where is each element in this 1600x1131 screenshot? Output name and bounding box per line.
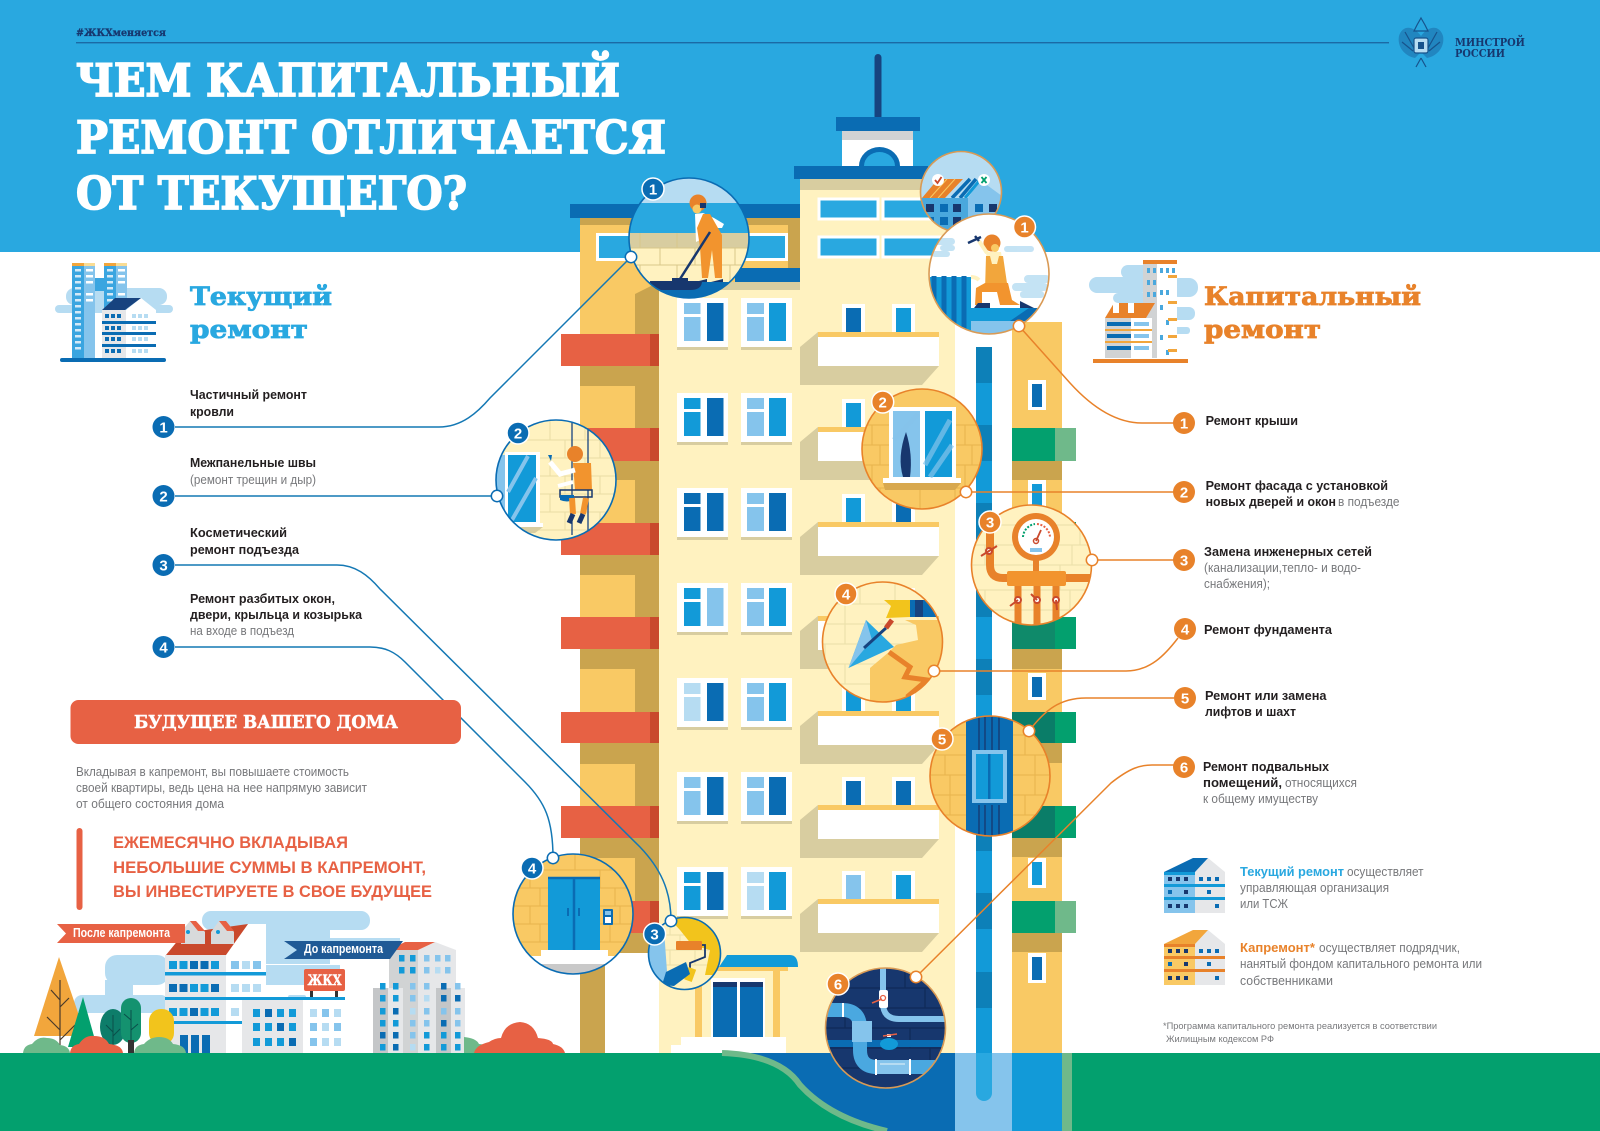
right list: item 6 — [1173, 756, 1357, 806]
icon: eagle emblem — [1399, 18, 1443, 67]
left heading icon: buildings — [55, 263, 173, 362]
magnifier badges: orange: 5 — [938, 732, 946, 748]
connection markers — [491, 251, 1098, 983]
ground — [0, 1053, 1600, 1131]
right heading icon: buildings — [1089, 260, 1198, 363]
right list: item 2: новых дверей и окон — [1206, 495, 1336, 509]
illustration: town before and after — [23, 911, 565, 1053]
left wing — [561, 204, 800, 1053]
magnifier badges: orange: 1 — [1020, 220, 1029, 236]
footnote — [1163, 1021, 1437, 1045]
right list: item 5 — [1174, 687, 1328, 719]
callout: monthly investing: НЕБОЛЬШИЕ СУММЫ В КАПРЕМОНТ, — [113, 859, 426, 877]
title — [76, 51, 666, 220]
trees — [34, 957, 174, 1053]
callout: monthly investing: ЕЖЕМЕСЯЧНО ВКЛАДЫВАЯ — [113, 834, 348, 852]
right list: item 3: 3 — [1180, 552, 1188, 570]
left list: item 2: 2 — [159, 488, 168, 506]
text block: investment note: своей квартиры, ведь цена на нее напрямую зависит — [76, 781, 367, 795]
right list: item 3: (канализации,тепло- и водо- — [1204, 561, 1361, 575]
left list: item 1: 1 — [159, 420, 168, 436]
right list: item 5: 5 — [1181, 690, 1189, 708]
left list: item 2: Межпанельные швы — [190, 456, 316, 470]
magnifier R3: utilities gauge — [971, 505, 1092, 625]
legend: current repair: осуществляет — [1347, 865, 1424, 879]
magnifier badges: orange: 2 — [879, 394, 887, 412]
header rule — [76, 42, 1389, 43]
magnifier badges: blue: 1 — [649, 182, 657, 198]
ribbon: before repair: До капремонта — [304, 942, 384, 956]
heading: capital repair: Капитальный — [1204, 282, 1421, 311]
left list: item 4: Ремонт разбитых окон, — [190, 592, 335, 606]
legend: current repair: управляющая организация — [1240, 881, 1389, 895]
magnifier R6: basement pipes — [825, 968, 946, 1089]
text block: investment note: Вкладывая в капремонт, вы повышаете стоимость — [76, 765, 349, 779]
banner: future of your home: БУДУЩЕЕ ВАШЕГО ДОМА — [134, 713, 399, 733]
icon: orange house — [1164, 930, 1225, 985]
window rows — [677, 298, 792, 919]
ribbon: before repair — [284, 941, 403, 959]
callout: monthly investing — [76, 828, 432, 910]
title: ЧЕМ КАПИТАЛЬНЫЙ — [76, 51, 620, 107]
connector lines: right — [916, 326, 1178, 977]
icon: blue house — [1164, 858, 1225, 913]
header band — [0, 0, 1600, 252]
right list: item 6: к общему имуществу — [1203, 792, 1319, 806]
magnifier badges: blue: 4 — [528, 860, 537, 878]
left list: item 4: на входе в подъезд — [190, 624, 295, 638]
ribbon: after repair — [57, 924, 185, 943]
connector lines: left — [175, 257, 671, 921]
magnifier: roof condition — [920, 152, 1002, 233]
right list: item 1 — [1173, 412, 1298, 434]
magnifier L1: roof worker — [628, 178, 750, 299]
right list: item 1: 1 — [1180, 416, 1188, 432]
right list: item 6: Ремонт подвальных — [1203, 760, 1329, 774]
magnifier R1: roofer — [929, 214, 1050, 334]
right list: item 4 — [1174, 618, 1333, 640]
sign ЖКХ: ЖКХ — [308, 973, 342, 989]
heading: current repair: Текущий — [190, 282, 332, 311]
sign ЖКХ — [304, 969, 345, 997]
elevator shaft — [955, 285, 1012, 1053]
building before repair — [373, 942, 465, 1053]
magnifier L2: facade worker — [496, 420, 616, 540]
heading: capital repair — [1204, 282, 1421, 344]
hashtag: #ЖКХменяется — [76, 28, 167, 39]
underground — [722, 1053, 1072, 1131]
magnifier badges: orange: 3 — [986, 514, 994, 532]
legend: capital repair: собственниками — [1240, 974, 1333, 988]
right list: item 3: снабжения); — [1204, 577, 1270, 591]
left list: item 1 — [152, 388, 307, 438]
magnifier L3: paint roller — [648, 917, 722, 990]
entrance — [671, 955, 798, 1053]
logo: Minstroy: МИНСТРОЙ — [1455, 34, 1525, 49]
right list: item 4: 4 — [1181, 622, 1190, 638]
legend: current repair: Текущий ремонт — [1240, 865, 1344, 879]
logo: Minstroy — [1399, 18, 1525, 67]
magnifier badges: orange: 4 — [842, 586, 851, 604]
legend: current repair — [1164, 858, 1424, 913]
left list: item 1: Частичный ремонт — [190, 388, 307, 402]
right list: item 6: 6 — [1180, 760, 1188, 776]
banner: future of your home — [70, 700, 461, 744]
right list: item 3: Замена инженерных сетей — [1204, 545, 1372, 559]
left list: item 4 — [152, 592, 363, 658]
right list: item 5: лифтов и шахт — [1205, 705, 1296, 719]
heading: current repair — [190, 282, 332, 344]
bushes — [23, 1022, 565, 1053]
legend: capital repair — [1164, 930, 1482, 988]
right list: item 2: 2 — [1180, 484, 1188, 502]
magnifier L4: entrance door — [513, 854, 633, 974]
ribbon: after repair: После капремонта — [73, 926, 171, 940]
magnifier R4: foundation repair — [822, 582, 944, 702]
legend: capital repair: нанятый фондом капитального ремонта или — [1240, 957, 1482, 971]
right wing — [1012, 322, 1076, 1053]
text block: investment note — [76, 765, 367, 811]
right list: item 6: относящихся — [1285, 776, 1357, 790]
main building — [561, 54, 1076, 1131]
left list: item 3: ремонт подъезда — [190, 543, 300, 557]
magnifier R5: elevator — [930, 716, 1050, 837]
title: ОТ ТЕКУЩЕГО? — [76, 167, 467, 220]
balconies — [800, 304, 939, 952]
logo: Minstroy: РОССИИ — [1455, 47, 1505, 60]
magnifier badges: blue: 3 — [650, 926, 659, 944]
left list: item 3: Косметический — [190, 526, 287, 540]
right list: item 2: в подъезде — [1338, 495, 1400, 509]
right list: item 2: Ремонт фасада с установкой — [1206, 479, 1388, 493]
footnote: Жилищным кодексом РФ — [1166, 1034, 1274, 1045]
magnifier badges: blue — [507, 178, 666, 945]
heading: capital repair: ремонт — [1204, 315, 1321, 344]
left list: item 2 — [152, 456, 316, 507]
right list: item 3 — [1173, 545, 1372, 591]
tower spire — [836, 54, 920, 166]
heading: current repair: ремонт — [190, 315, 308, 344]
legend: capital repair: осуществляет подрядчик, — [1319, 941, 1460, 955]
right list: item 2 — [1173, 479, 1400, 509]
text block: investment note: от общего состояния дома — [76, 797, 224, 811]
building after repair — [165, 921, 345, 1053]
magnifier R2: window — [862, 389, 982, 509]
left list: item 3: 3 — [159, 558, 168, 574]
legend: current repair: или ТСЖ — [1240, 897, 1288, 911]
left list: item 4: двери, крыльца и козырька — [190, 608, 363, 622]
legend: capital repair: Капремонт* — [1240, 941, 1315, 955]
magnifier badges: blue: 2 — [514, 426, 522, 442]
left list: item 3 — [152, 526, 300, 576]
left list: item 4: 4 — [159, 640, 168, 656]
central block — [659, 166, 955, 1053]
clouds — [74, 911, 400, 1013]
magnifier badges: orange: 6 — [834, 976, 842, 994]
callout: monthly investing: ВЫ ИНВЕСТИРУЕТЕ В СВОЕ БУДУЩЕЕ — [113, 883, 432, 901]
low building — [242, 1000, 345, 1053]
right list: item 1: Ремонт крыши — [1206, 414, 1298, 428]
right list: item 4: Ремонт фундамента — [1204, 623, 1333, 637]
title: РЕМОНТ ОТЛИЧАЕТСЯ — [76, 111, 666, 164]
footnote: *Программа капитального ремонта реализуется в соответствии — [1163, 1021, 1437, 1032]
left list: item 1: кровли — [190, 405, 234, 419]
magnifier badges: orange — [827, 216, 1036, 995]
right list: item 5: Ремонт или замена — [1205, 689, 1328, 703]
left list: item 2: (ремонт трещин и дыр) — [190, 473, 316, 487]
right list: item 6: помещений, — [1203, 776, 1282, 790]
